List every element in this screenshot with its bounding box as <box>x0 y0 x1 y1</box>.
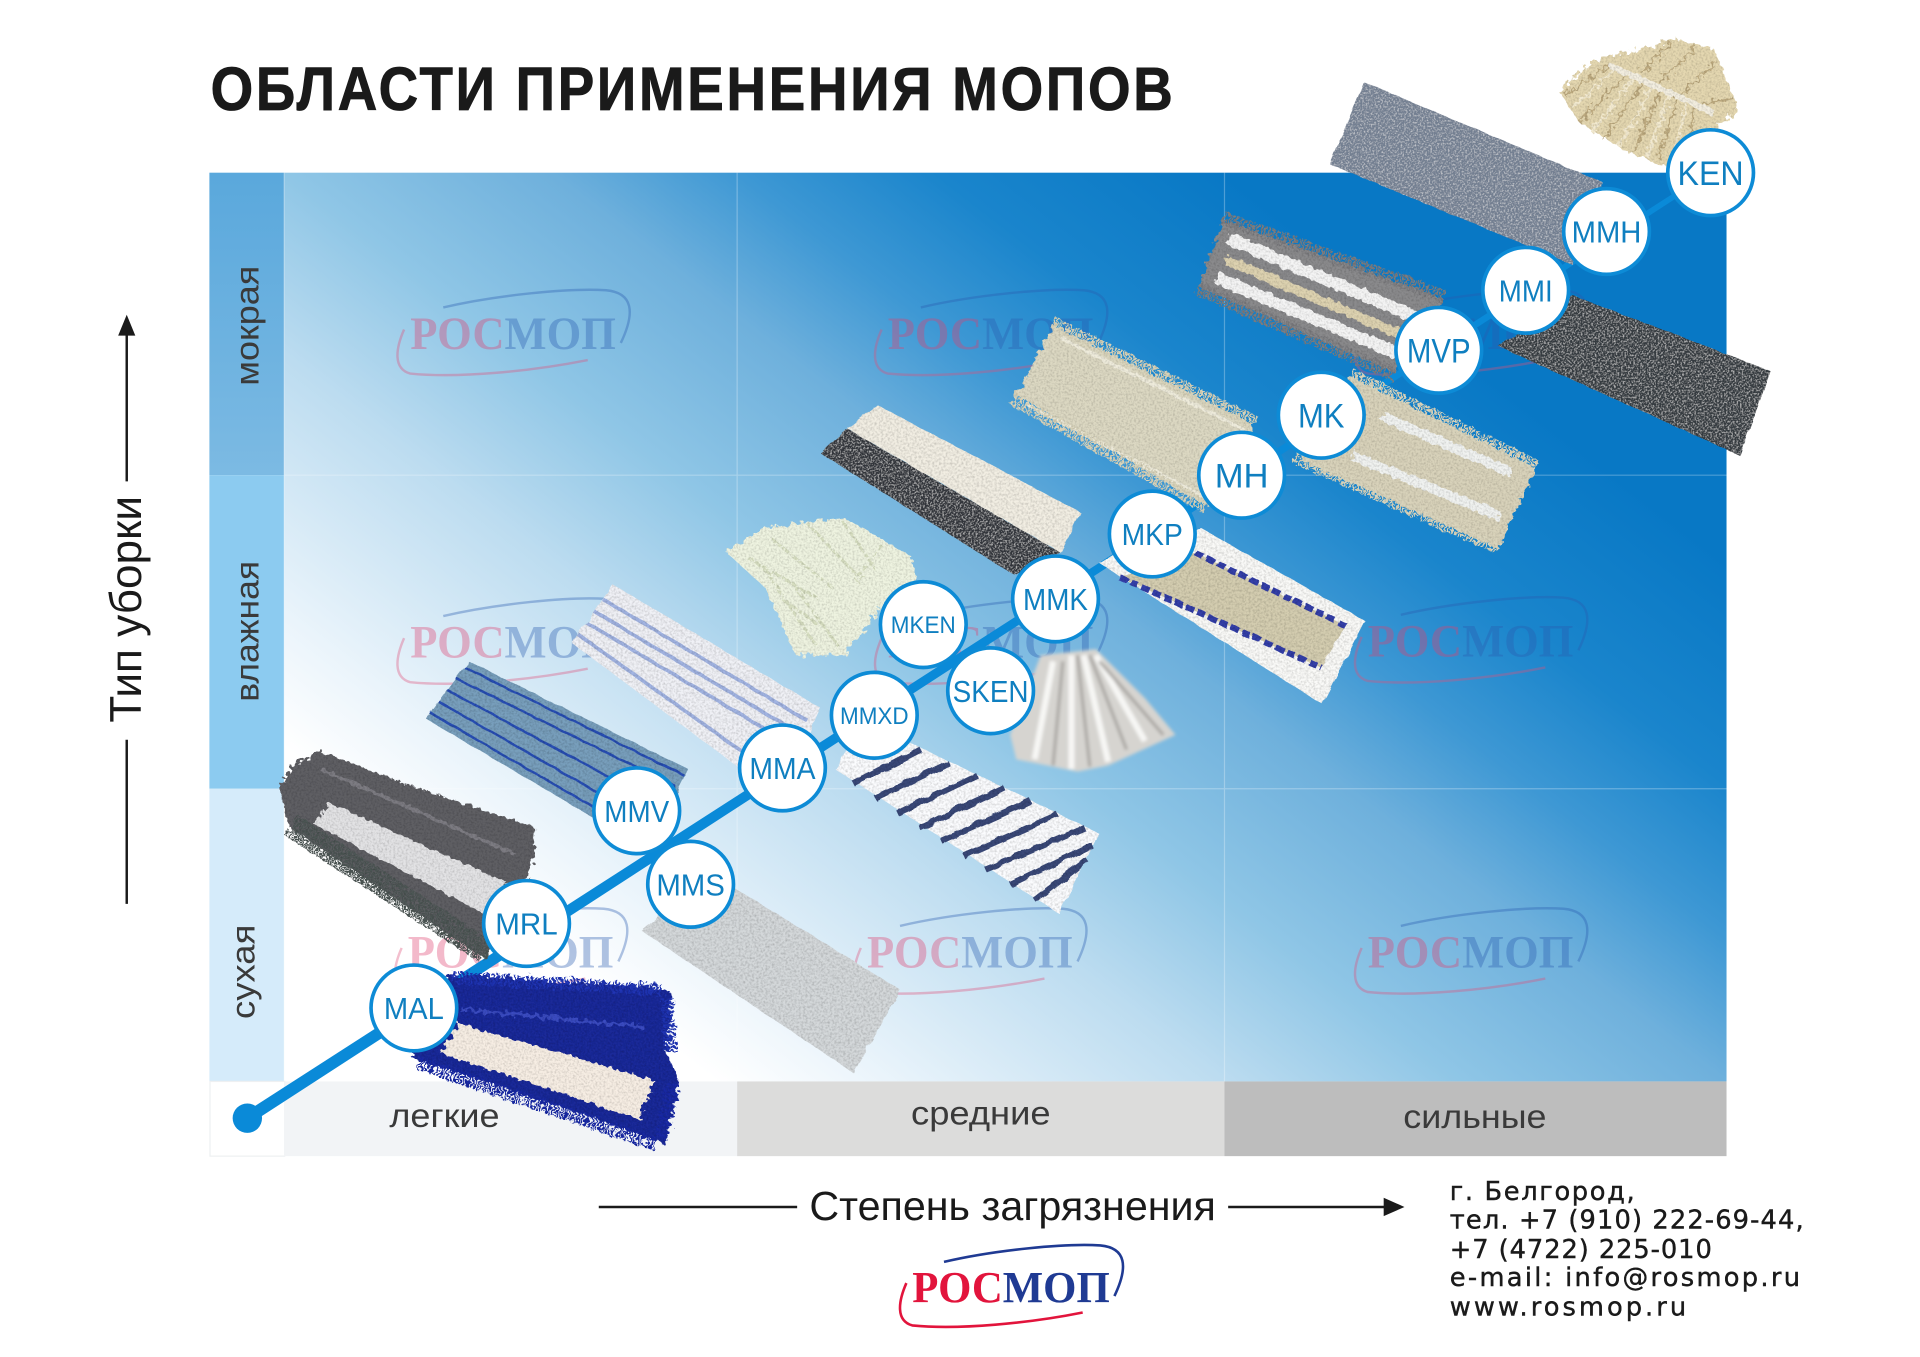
x axis title: Степень загрязнения: Степень загрязнения <box>809 1183 1216 1229</box>
watermark: row 1 column 3: РОСМОП <box>1368 309 1573 360</box>
watermark: row 2 column 1: РОСМОП <box>410 618 616 669</box>
watermark: row 3 column 1: РОСМОП <box>408 928 613 979</box>
contact details: тел. +7 (910) 222-69-44, <box>1450 1205 1804 1235</box>
panel: chart grid <box>209 173 1727 1156</box>
watermark: row 2 column 3: РОСМОП <box>1368 616 1573 667</box>
row label: мокрая: мокрая <box>229 266 266 386</box>
badge: MH <box>1199 432 1284 518</box>
mop photo: SKEN white strands <box>1010 649 1176 772</box>
badge: MMH <box>1564 189 1649 274</box>
watermark: row 1 column 1: РОСМОП <box>410 309 616 360</box>
badge: MRL: MRL <box>495 907 558 941</box>
badge: MMI: MMI <box>1499 274 1553 308</box>
mop photo: MMH grey <box>1330 82 1603 265</box>
badge: MMA <box>740 725 825 811</box>
watermark: row 1 column 3 <box>1355 290 1587 375</box>
badge: MH: MH <box>1215 457 1269 495</box>
badge: MAL <box>371 965 457 1051</box>
row label: влажная: влажная <box>229 561 266 702</box>
mop photo: MMS light grey <box>642 888 900 1073</box>
mop photo: MMI dark <box>1499 295 1771 456</box>
badge: MKEN <box>880 582 966 667</box>
arrow: horizontal axis <box>599 1198 1404 1216</box>
badge: MMK <box>1013 556 1098 642</box>
mop photo: MMA white with blue <box>572 584 820 769</box>
mop photo: MMXD white with navy <box>835 735 1098 914</box>
watermark: row 2 column 3 <box>1355 597 1587 682</box>
mop photo: MH beige fringe <box>1014 323 1255 507</box>
watermark: row 3 column 3 <box>1355 908 1587 994</box>
mop photo: KEN cream strands <box>1559 39 1739 171</box>
badge: MMS <box>648 841 733 927</box>
contact details: e-mail: info@rosmop.ru <box>1450 1263 1800 1293</box>
badge: MAL: MAL <box>384 992 444 1026</box>
diagonal progress line <box>233 170 1712 1133</box>
badge: MMI <box>1483 247 1569 333</box>
watermark: row 1 column 2 <box>875 290 1107 375</box>
title: ОБЛАСТИ ПРИМЕНЕНИЯ МОПОВ <box>211 55 1176 123</box>
badge: KEN <box>1668 130 1753 216</box>
mop photo: MVP grey and white <box>1199 218 1444 375</box>
badge: MKP: MKP <box>1122 518 1183 552</box>
logo: РОСМОП <box>900 1245 1123 1327</box>
badge: MMS: MMS <box>656 868 725 902</box>
watermark: row 2 column 2: РОСМОП <box>888 618 1093 669</box>
watermark: row 1 column 2: РОСМОП <box>888 309 1093 360</box>
mop photo: MKEN pale green <box>725 518 916 655</box>
badge: MK: MK <box>1298 397 1345 435</box>
badge: MMXD: MMXD <box>840 703 909 730</box>
watermark: row 2 column 1 <box>397 598 630 684</box>
mop photo: MMK black and white <box>820 405 1080 576</box>
badge: KEN: KEN <box>1678 155 1744 193</box>
mop photo: MK beige with white <box>1296 375 1536 549</box>
contact details: г. Белгород, <box>1450 1177 1635 1207</box>
mop photo: MKP beige with blue <box>1100 529 1365 704</box>
badge: MMV <box>594 768 680 854</box>
watermark: row 2 column 2 <box>875 598 1107 684</box>
badge: MKP <box>1109 491 1195 577</box>
badge: MMV: MMV <box>604 795 670 829</box>
column label: легкие: легкие <box>389 1098 500 1135</box>
logo: РОСМОП: РОСМОП <box>912 1262 1110 1312</box>
mop photo: MAL blue fringe <box>410 975 680 1144</box>
contact details: +7 (4722) 225-010 <box>1450 1235 1712 1265</box>
badge: MMH: MMH <box>1572 215 1641 249</box>
column label: средние: средние <box>911 1095 1051 1132</box>
badge: MRL <box>484 881 569 966</box>
arrow: vertical axis <box>118 315 135 904</box>
badge: MMK: MMK <box>1023 583 1088 617</box>
watermark: row 3 column 2 <box>854 908 1086 994</box>
badge: MKEN: MKEN <box>891 612 956 639</box>
badge: MMA: MMA <box>749 752 816 786</box>
watermark: row 1 column 1 <box>397 290 630 375</box>
badge: MVP: MVP <box>1407 333 1471 371</box>
badge: MVP <box>1396 307 1482 393</box>
badge: MK <box>1278 372 1364 458</box>
row label: сухая: сухая <box>226 925 263 1019</box>
y axis title: Тип уборки: Тип уборки <box>102 496 151 723</box>
watermark: row 3 column 3: РОСМОП <box>1368 928 1573 979</box>
column label: сильные: сильные <box>1403 1099 1547 1136</box>
contact details: www.rosmop.ru <box>1450 1292 1686 1322</box>
mop photo: MMV blue stripes <box>426 661 688 823</box>
badge: MMXD <box>831 672 917 758</box>
badge: SKEN <box>948 648 1033 734</box>
watermark: row 3 column 2: РОСМОП <box>867 928 1073 979</box>
badge: SKEN: SKEN <box>953 675 1029 709</box>
mop photo: MRL grey fringe <box>279 751 535 958</box>
watermark: row 3 column 1 <box>395 908 627 994</box>
contact details <box>1450 1177 1804 1322</box>
